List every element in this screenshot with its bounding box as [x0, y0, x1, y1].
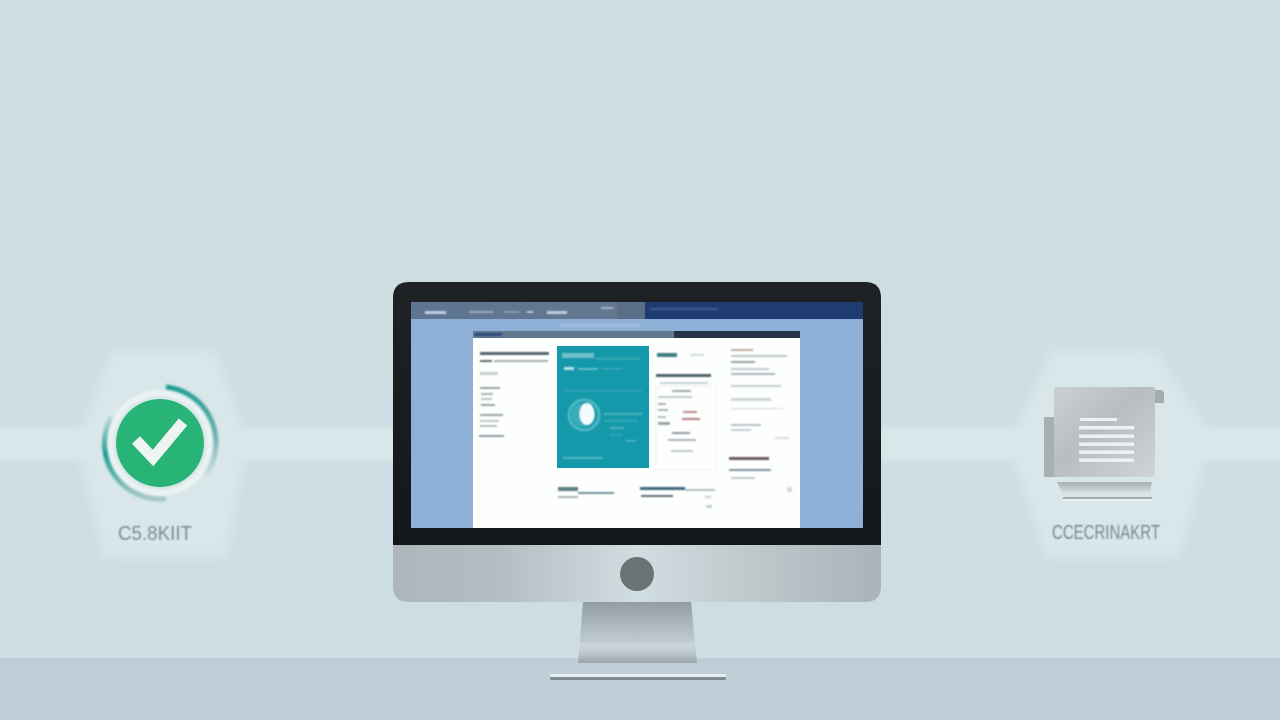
web page: [473, 331, 800, 528]
teal panel ring chart: [569, 400, 599, 430]
page right column: [729, 349, 792, 492]
floor band: [0, 658, 1280, 720]
camera button: [620, 557, 654, 591]
browser header: [411, 302, 863, 319]
monitor: [393, 282, 881, 680]
page footer blocks: [558, 487, 715, 508]
monitor bezel: [393, 282, 881, 545]
monitor foot: [550, 674, 726, 680]
panel: right document hexagon: [1008, 350, 1212, 558]
monitor chin: [393, 545, 881, 602]
page sidebar text: [479, 352, 549, 437]
label: right document caption: CCECRINAKRT: [1052, 522, 1160, 544]
monitor stand: [578, 602, 697, 663]
page top bar: [473, 331, 800, 338]
icon: green check badge: [104, 387, 216, 499]
horizontal connector band: [0, 428, 1280, 460]
icon: document tray: [1044, 387, 1164, 501]
panel: left status hexagon: [76, 350, 248, 558]
monitor screen: [411, 302, 863, 528]
teal feature panel: [557, 346, 649, 468]
page center form: [656, 353, 716, 470]
label: left status caption: C5.8KIIT: [118, 523, 192, 545]
